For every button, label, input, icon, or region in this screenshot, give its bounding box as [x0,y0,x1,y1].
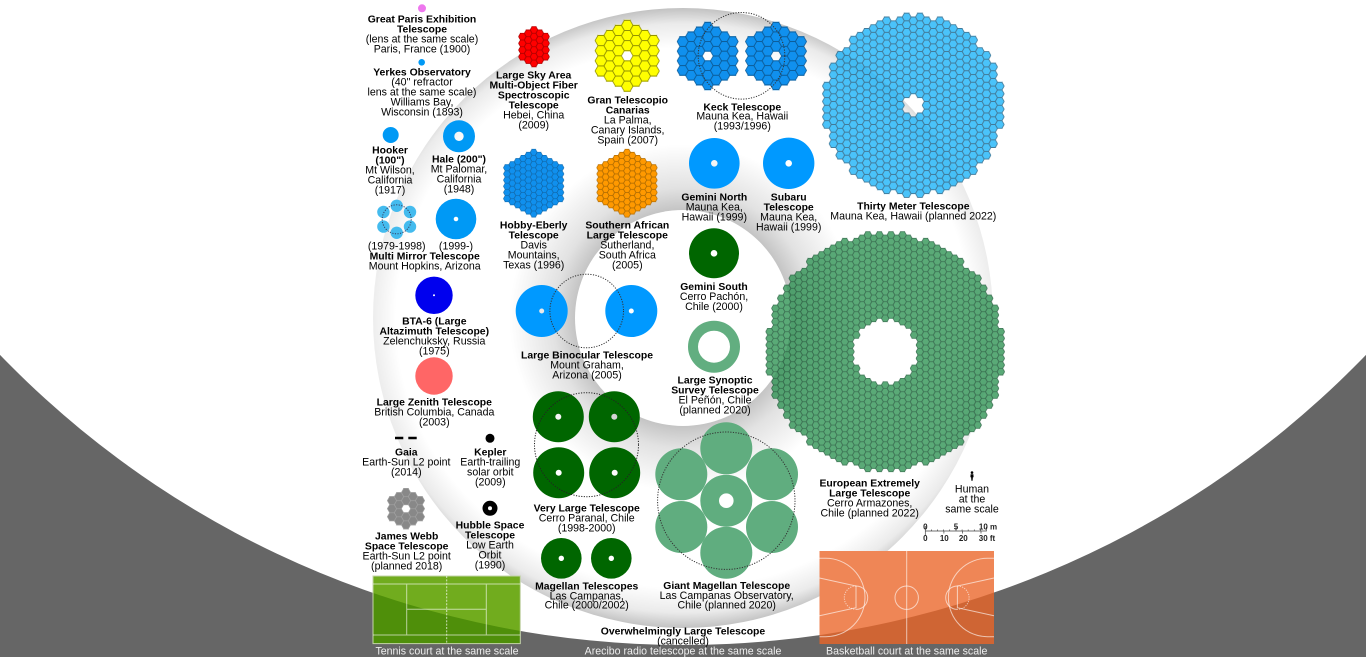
label: Mauna Kea, [760,211,817,223]
mirror [383,127,399,143]
label: Earth-Sun L2 point [362,456,451,468]
label: Chile (planned 2022) [821,507,919,519]
label: Multi-Object Fiber [490,80,578,91]
label: Great Paris Exhibition [368,14,476,25]
label: Davis [520,239,547,251]
mirror: left [516,285,568,337]
telescope: Giant Magellan Telescope [655,422,798,611]
mirror segments [601,20,654,92]
label: Space Telescope [365,541,449,552]
label: Spain (2007) [597,134,658,146]
scale labels: 20 [959,534,968,543]
label: Yerkes Observatory [373,67,471,78]
label: Telescope [397,24,447,35]
label: (1975) [419,345,450,357]
label: Hawaii (1999) [682,211,747,223]
label: (2014) [391,466,422,478]
label: British Columbia, Canada [374,406,494,418]
label: Hale (200") [432,154,486,165]
telescope: James Webb [363,488,451,572]
label: Gran Telescopio [587,95,668,106]
label: Telescope [465,530,515,541]
label: Earth-trailing [460,456,520,468]
lens icon [418,59,425,66]
label: solar orbit [467,466,514,478]
telescope: Multi Mirror Telescope [368,199,481,272]
court surface over white area [820,551,994,644]
label: Wisconsin (1893) [381,106,463,118]
label: (planned 2018) [371,560,442,572]
label: Magellan Telescopes [535,581,639,592]
mirror segments [600,149,654,218]
label: Canary Islands, [591,124,665,136]
lens icon [418,4,426,12]
telescope: Very Large Telescope [533,391,640,534]
label: Survey Telescope [671,385,759,396]
label: Hebei, China [503,109,564,121]
label: Hubble Space [456,520,525,531]
label: Large Telescope [587,230,668,241]
label: Las Campanas, [550,590,624,602]
telescope: Thirty Meter Telescope [827,13,1000,222]
label: Telescope [509,230,559,241]
label: Large Zenith Telescope [377,397,492,408]
label: (2003) [419,416,450,428]
label: Large Binocular Telescope [521,350,653,361]
scale line and ticks [925,526,987,536]
label: La Palma, [604,114,652,126]
telescope: European Extremely Large Telescope [770,231,1001,519]
label: human: at the [959,494,985,506]
label: Arizona (2005) [552,369,622,381]
label: Very Large Telescope [534,503,640,514]
mirror annulus [688,321,740,373]
label: Thirty Meter Telescope [857,201,970,212]
label: Gemini South [680,282,748,293]
court lines [820,551,994,644]
mirror: Keck I segments [683,22,733,90]
label: Mount Hopkins, Arizona [369,260,481,272]
scale labels: 0 [923,522,928,532]
label: Mount Graham, [550,359,624,371]
mirror [486,434,494,443]
court lines [373,584,520,635]
mirror: right [605,285,657,337]
label: Cerro Armazones, [827,497,912,509]
label: Mauna Kea, Hawaii [696,110,788,122]
label: Large Synoptic [677,375,753,386]
label: Mt Wilson, [365,164,415,176]
label: Telescope [764,202,814,213]
label: (2009) [475,476,506,488]
label: Orbit [479,549,502,561]
label: Hooker [372,145,408,156]
telescope: Southern African Large Telescope [585,149,669,271]
label: Subaru [771,192,807,203]
mirror segments [392,488,420,529]
label: (2005) [612,259,643,271]
scale labels: 30 ft [979,534,996,543]
scale bar [923,522,997,543]
label: Sutherland, [600,239,654,251]
court border [373,576,520,644]
telescope: Hooker [365,127,415,196]
interferometer baseline circle [550,274,624,348]
label: (1948) [444,183,474,195]
label: (2009) [518,119,549,131]
scale labels: 5 [954,522,959,532]
label: Cerro Paranal, Chile [539,512,635,524]
mirror [415,357,453,395]
mirror [443,120,475,152]
label: (planned 2020) [679,404,751,416]
label: Multi Mirror Telescope [370,251,480,262]
mirror segments [770,231,1001,472]
telescope: Hubble [456,501,525,571]
label: (lens at the same scale) [366,33,478,45]
mirror [415,277,453,314]
court surface over dark area [820,551,994,644]
label: (1998-2000) [558,522,616,534]
mirror: 1999 onwards [436,199,476,239]
label: Mountains, [508,249,560,261]
telescope: Hale [431,120,487,195]
scale labels: 0 [923,534,928,543]
telescope: Large Zenith Telescope [374,357,494,428]
label: (1979-1998) [368,240,426,252]
label: European Extremely [819,478,920,489]
label: California [368,174,412,186]
court surface over dark area [373,576,520,644]
label: lens at the same scale) [368,86,476,98]
label: James Webb [375,531,438,542]
scale labels: 10 m [979,522,997,532]
label: Spectroscopic [498,90,570,101]
label: Overwhelmingly Large Telescope: Overwhelmingly Large Telescope [601,627,765,638]
telescope: LAMOST [490,26,578,131]
telescope: Yerkes Observatory [368,59,476,118]
label: Low Earth [466,539,514,551]
label: Keck Telescope [703,102,781,113]
label: Gaia [395,447,418,458]
telescope: Magellan [535,538,639,611]
mirror [763,138,814,189]
label: South Africa [599,249,656,261]
label: Southern African [585,220,669,231]
telescope: Gaia [362,437,451,478]
telescope: Keck [683,12,801,132]
label: Mauna Kea, Hawaii (planned 2022) [830,210,996,222]
telescope: Gemini North [681,138,747,223]
Arecibo dish ring at the same scale [373,8,993,628]
label: Paris, France (1900) [374,43,470,55]
telescope: Hobby-Eberly [500,149,568,271]
baseline circle [658,432,795,569]
label: Overwhelmingly Large Telescope: (cancelled) [657,636,709,648]
label: Las Campanas Observatory, [660,590,794,602]
interferometer baseline circle [534,393,638,497]
label: BTA-6 (Large [402,316,467,327]
seven mirrors [655,422,798,579]
label: Large Sky Area [496,70,572,81]
mirrors [395,437,417,439]
label: Gemini North [681,192,747,203]
label: human: Human [955,484,989,496]
mirror [482,501,498,516]
label: Cerro Pachón, [680,291,748,303]
label: California [437,173,481,185]
label: (40" refractor [391,76,453,88]
label: Canarias [606,105,650,116]
four unit mirrors [533,391,640,498]
label: Hobby-Eberly [500,220,568,231]
label: (1993/1996) [714,120,771,132]
label: Hawaii (1999) [756,221,821,233]
mirror: Keck II segments [751,22,801,90]
label: Texas (1996) [503,259,564,271]
label: Large Telescope [829,488,911,499]
icon: human at scale [970,471,974,481]
mirror: 1979-1998 six segments [377,200,416,239]
telescope: Large Binocular Telescope [516,274,657,381]
mirror segments [507,149,560,218]
telescope: Subaru [756,138,821,233]
label: Chile (2000/2002) [545,599,629,611]
telescope: Gran Telescopio Canarias [587,20,668,146]
telescope: Gemini South [680,228,748,313]
label: Zelenchuksky, Russia [383,335,486,347]
mirror [689,228,739,278]
label: human: same scale [945,504,999,516]
label: Giant Magellan Telescope [663,581,790,592]
telescope: Great Paris Exhibition [366,4,478,55]
label: Chile (2000) [685,301,743,313]
label: Mauna Kea, [686,201,743,213]
label: Telescope [509,100,559,111]
label: Earth-Sun L2 point [363,550,451,562]
twin mirrors [541,538,632,579]
tennis court [373,576,520,644]
label: Altazimuth Telescope) [380,326,489,337]
scale labels: 10 [940,534,949,543]
mirror [689,138,740,189]
interferometer baseline circle [698,12,785,99]
label: Kepler [474,447,506,458]
label: Chile (planned 2020) [678,599,776,611]
court surface over white area [374,576,520,631]
label: (1917) [375,184,405,196]
mirror segments [522,26,546,67]
label: (100") [375,155,405,166]
label: Williams Bay, [391,96,453,108]
telescope: Kepler [460,434,520,488]
label: (1999-) [439,240,473,252]
label: El Peñón, Chile [678,394,752,406]
mirror segments [827,13,1000,198]
net [446,576,448,644]
telescope: Large Synoptic Survey Telescope [671,321,759,416]
label: (1990) [475,559,505,571]
label: Mt Palomar, [431,163,487,175]
basketball court [820,551,994,644]
telescope: BTA-6 [380,277,489,357]
